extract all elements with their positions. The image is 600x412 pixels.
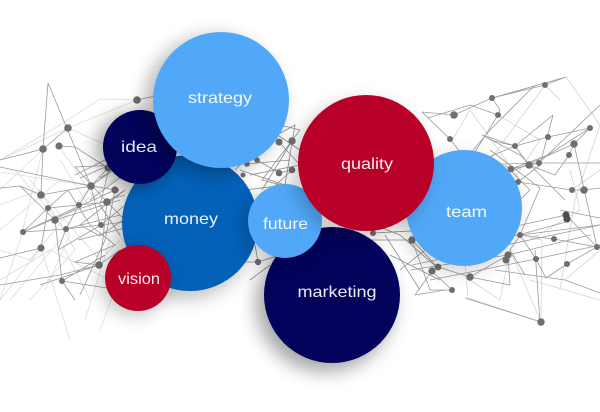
network: right cluster [410,77,600,322]
circle: strategy [144,32,289,174]
circle: vision [101,245,171,315]
circle: quality: quality [341,156,393,173]
circle: team [401,150,522,272]
circle: future [244,184,322,263]
circle: quality [293,95,434,237]
network nodes [20,82,600,326]
circle: strategy: strategy [188,90,252,107]
network: centre cluster [235,125,440,290]
circle: vision: vision [118,271,160,288]
circle: future: future [263,216,308,233]
circle: idea [97,110,177,187]
circle: team: team [446,204,487,221]
circle: idea: idea [121,139,157,156]
circle: money [115,155,258,299]
network: left cluster [0,83,160,340]
circle: marketing [256,227,400,372]
circle: money: money [164,211,218,228]
circle: marketing: marketing [298,284,376,301]
